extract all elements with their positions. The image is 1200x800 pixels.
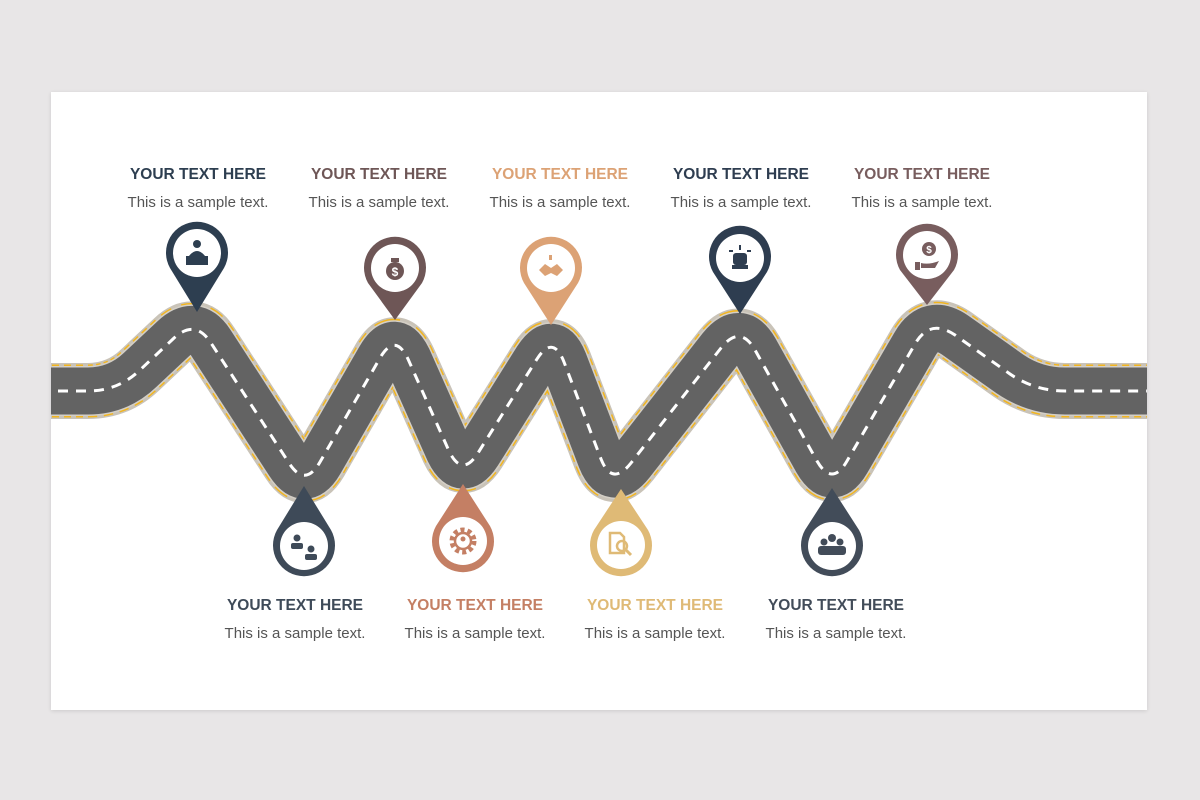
pin 5 — [896, 224, 958, 305]
text: This is a sample text. — [852, 194, 992, 211]
icon: people exchange — [291, 534, 317, 560]
text 1 — [128, 166, 268, 211]
pin 7 — [432, 484, 494, 572]
text: YOUR TEXT HERE — [673, 166, 809, 183]
icon: document search — [610, 533, 631, 555]
text: This is a sample text. — [309, 194, 449, 211]
text: YOUR TEXT HERE — [130, 166, 266, 183]
card background — [51, 92, 1147, 710]
text 6 — [224, 597, 365, 642]
icon: gear — [452, 530, 474, 552]
pin 1 — [166, 222, 228, 312]
icon: team — [818, 534, 846, 555]
text 4 — [670, 166, 811, 211]
pin 9 — [801, 488, 863, 576]
road — [51, 222, 1147, 576]
pin 3 — [520, 237, 582, 325]
icon: fist idea — [729, 245, 751, 269]
pin 2 — [364, 237, 426, 320]
icon: handshake — [539, 255, 563, 276]
text: This is a sample text. — [128, 194, 268, 211]
pin 4 — [709, 226, 771, 314]
text: YOUR TEXT HERE — [492, 166, 628, 183]
text: YOUR TEXT HERE — [227, 597, 363, 614]
text: This is a sample text. — [405, 625, 545, 642]
text: This is a sample text. — [490, 194, 630, 211]
text: This is a sample text. — [585, 625, 725, 642]
text 3 — [490, 166, 630, 211]
text 7 — [404, 597, 545, 642]
icon: money bag: $ — [392, 265, 399, 279]
text: YOUR TEXT HERE — [407, 597, 543, 614]
icon: presenter — [186, 240, 208, 265]
text 5 — [852, 166, 992, 211]
text: This is a sample text. — [766, 625, 906, 642]
pin 6 — [273, 486, 335, 576]
text: YOUR TEXT HERE — [854, 166, 990, 183]
text: YOUR TEXT HERE — [311, 166, 447, 183]
text: This is a sample text. — [225, 625, 365, 642]
text: This is a sample text. — [671, 194, 811, 211]
icon: hand coin: $ — [926, 245, 932, 256]
text 2 — [308, 166, 449, 211]
text: YOUR TEXT HERE — [587, 597, 723, 614]
text 8 — [584, 597, 725, 642]
text: YOUR TEXT HERE — [768, 597, 904, 614]
text 9 — [766, 597, 906, 642]
pin 8 — [590, 489, 652, 576]
